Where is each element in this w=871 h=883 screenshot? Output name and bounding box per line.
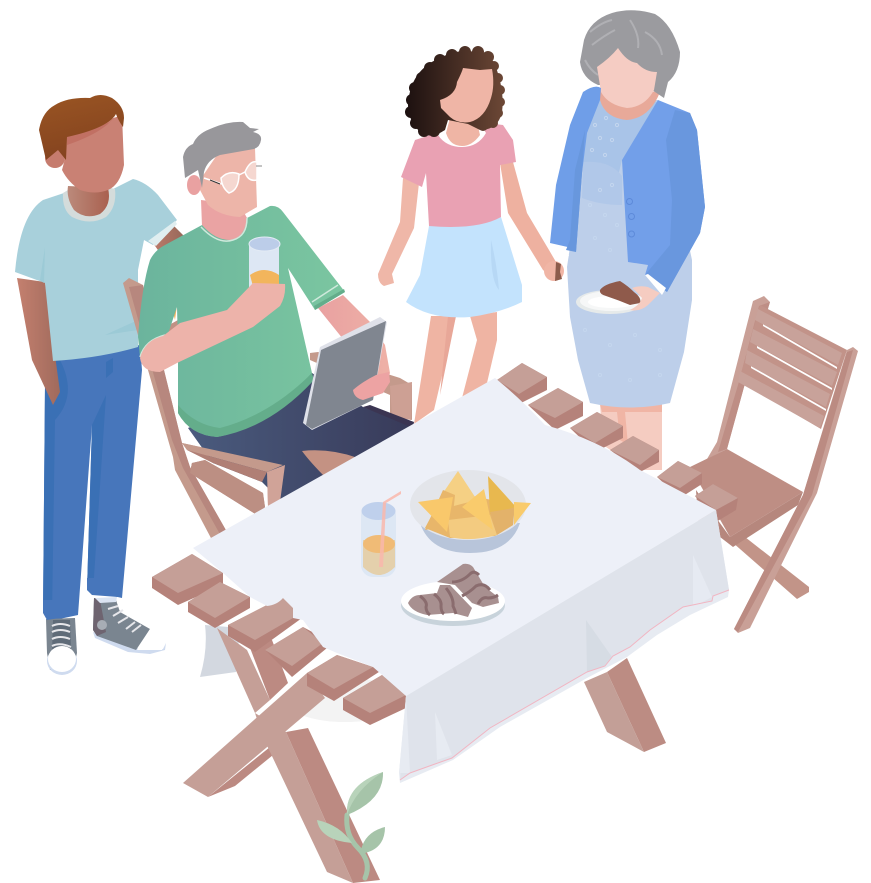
glasses xyxy=(204,162,262,193)
grandmother legs xyxy=(600,404,662,470)
grandmother neck xyxy=(600,88,660,120)
grandmother dress xyxy=(567,100,692,408)
picnic table xyxy=(152,363,738,883)
left wooden chair behind the man xyxy=(123,278,412,540)
glass held by seated man xyxy=(249,237,280,294)
back post and rear leg xyxy=(123,278,227,540)
glass of juice with straw xyxy=(361,491,401,577)
seated man raised arm xyxy=(140,283,285,372)
front leg and right post xyxy=(734,347,858,633)
back bench planks xyxy=(497,363,738,522)
cardigan left side xyxy=(550,87,601,252)
cross leg xyxy=(732,537,809,599)
back right table leg xyxy=(584,658,666,752)
man neck and collar xyxy=(63,187,115,222)
front bench planks xyxy=(152,554,406,725)
girl skirt xyxy=(406,217,522,317)
cuffs xyxy=(549,246,569,262)
cardigan buttons xyxy=(626,198,634,237)
trouser cuffs over shoes xyxy=(43,578,123,620)
plate of food in hand xyxy=(576,281,660,314)
grandmother xyxy=(549,10,705,470)
man right shoe xyxy=(93,597,166,654)
man face xyxy=(62,115,124,192)
girl xyxy=(378,46,564,424)
man far forearm xyxy=(153,225,184,253)
seated man with glasses xyxy=(138,122,414,515)
man left shoe xyxy=(46,618,77,675)
man left arm xyxy=(17,278,60,405)
front trestle legs xyxy=(183,628,380,883)
far armrest and post xyxy=(310,352,412,420)
tablecloth skirt xyxy=(399,510,729,783)
girl curly hair xyxy=(405,46,505,137)
bowl xyxy=(420,523,520,553)
girl legs xyxy=(414,316,456,424)
tablecloth hem line xyxy=(400,590,729,780)
seated man forearm to tablet xyxy=(318,295,390,400)
skirt folds xyxy=(586,620,612,672)
left post xyxy=(707,296,770,459)
man t-shirt xyxy=(15,179,177,361)
tablet xyxy=(303,317,387,430)
seated man knee xyxy=(302,450,358,478)
girl collar and neck xyxy=(438,120,486,147)
cardigan right side xyxy=(622,100,705,292)
man trousers xyxy=(43,345,142,621)
man ear xyxy=(45,148,65,168)
chair back slat pieces and orange seat glimpses xyxy=(160,320,178,350)
clasped hands xyxy=(544,261,564,281)
girl top xyxy=(401,124,516,227)
seated man hand xyxy=(353,372,390,400)
ground shadow xyxy=(285,678,405,722)
dress upper panel xyxy=(583,96,658,176)
back cloth drop xyxy=(200,625,240,677)
nacho chips xyxy=(425,490,515,538)
front post xyxy=(267,465,285,507)
girl face xyxy=(440,68,493,122)
back frame and slats xyxy=(739,305,847,429)
standing man xyxy=(15,95,184,675)
armrest over shorts xyxy=(182,443,283,472)
girl left arm xyxy=(378,178,419,286)
grandmother face xyxy=(597,48,657,108)
armrest xyxy=(182,443,283,472)
seated man hair xyxy=(183,122,261,188)
seated man ear xyxy=(187,175,201,195)
man hair xyxy=(39,95,124,160)
plate of grilled meat xyxy=(401,564,505,626)
lower rail xyxy=(190,460,265,515)
grandmother hair xyxy=(580,10,680,98)
bowl of nachos xyxy=(410,470,531,553)
seated man face xyxy=(200,148,257,217)
right folding chair xyxy=(690,296,858,633)
seated man neck xyxy=(201,200,247,241)
seated man shorts xyxy=(188,373,414,505)
plant sprig xyxy=(317,772,385,878)
tablecloth top xyxy=(193,378,716,696)
seat xyxy=(690,449,803,537)
girl right arm xyxy=(500,162,556,274)
seated man green sweater xyxy=(138,206,345,437)
